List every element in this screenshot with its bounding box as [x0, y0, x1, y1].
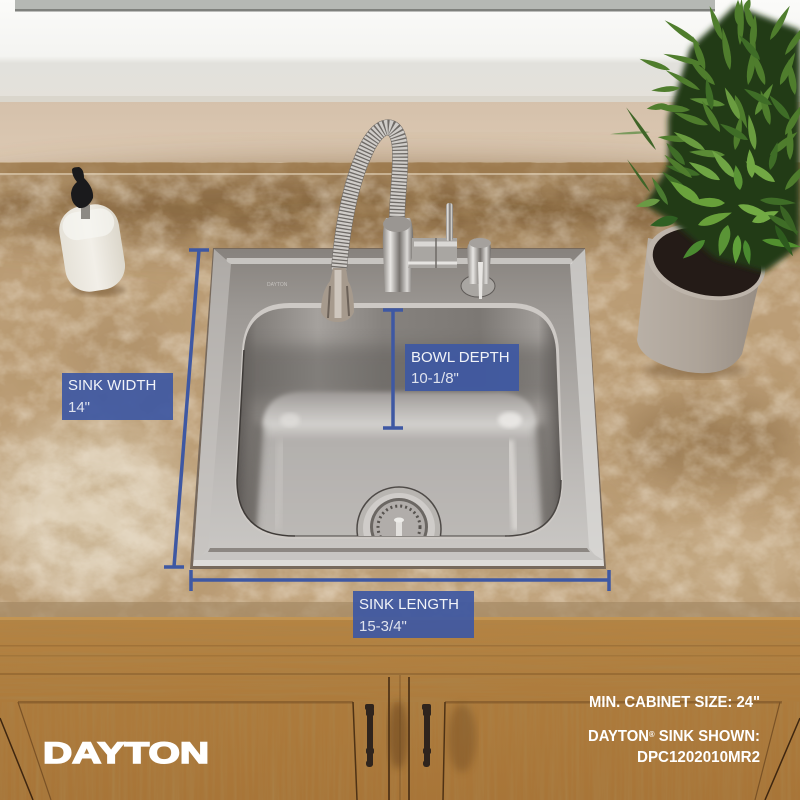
- soap dispenser: [461, 238, 495, 299]
- cabinet size and model text: MIN. CABINET SIZE: 24": [589, 694, 760, 711]
- cabinet: [0, 617, 800, 800]
- cabinet size and model text: ®: [649, 730, 655, 739]
- label: sink length: [191, 570, 609, 638]
- label: bowl depth: 10-1/8": [411, 370, 459, 387]
- wall: [0, 102, 800, 164]
- label: sink width: [62, 250, 209, 567]
- label: sink width: SINK WIDTH: [68, 377, 156, 394]
- plant leaves: [610, 0, 800, 272]
- sink brand mark: DAYTON: [267, 282, 288, 288]
- dimension line: sink length: [191, 570, 609, 591]
- soap bottle: [56, 167, 129, 296]
- plant pot: [637, 213, 772, 378]
- cabinet size and model text: DPC1202010MR2: [637, 749, 760, 766]
- cabinet size and model text: DAYTON: [588, 728, 652, 745]
- label: bowl depth: BOWL DEPTH: [411, 349, 510, 366]
- cabinet handles: [365, 704, 431, 767]
- sink: [190, 248, 606, 571]
- dimension line: sink width: [164, 250, 209, 567]
- label: sink length: 15-3/4": [359, 618, 407, 635]
- logo: Dayton: DAYTON: [43, 737, 209, 770]
- sink deck: [190, 248, 606, 569]
- bowl: [235, 303, 563, 540]
- drain: [356, 486, 442, 536]
- window and sill: [0, 0, 800, 102]
- cabinet size and model text: SINK SHOWN:: [655, 728, 760, 745]
- label: bowl depth: [383, 310, 519, 428]
- faucet: [321, 127, 457, 322]
- faucet hose head: [321, 268, 354, 322]
- countertop: [0, 162, 800, 618]
- cabinet size and model text: [588, 694, 760, 766]
- label: sink length: SINK LENGTH: [359, 596, 459, 613]
- label: sink width: 14": [68, 399, 90, 416]
- dimension line: bowl depth: [383, 310, 403, 428]
